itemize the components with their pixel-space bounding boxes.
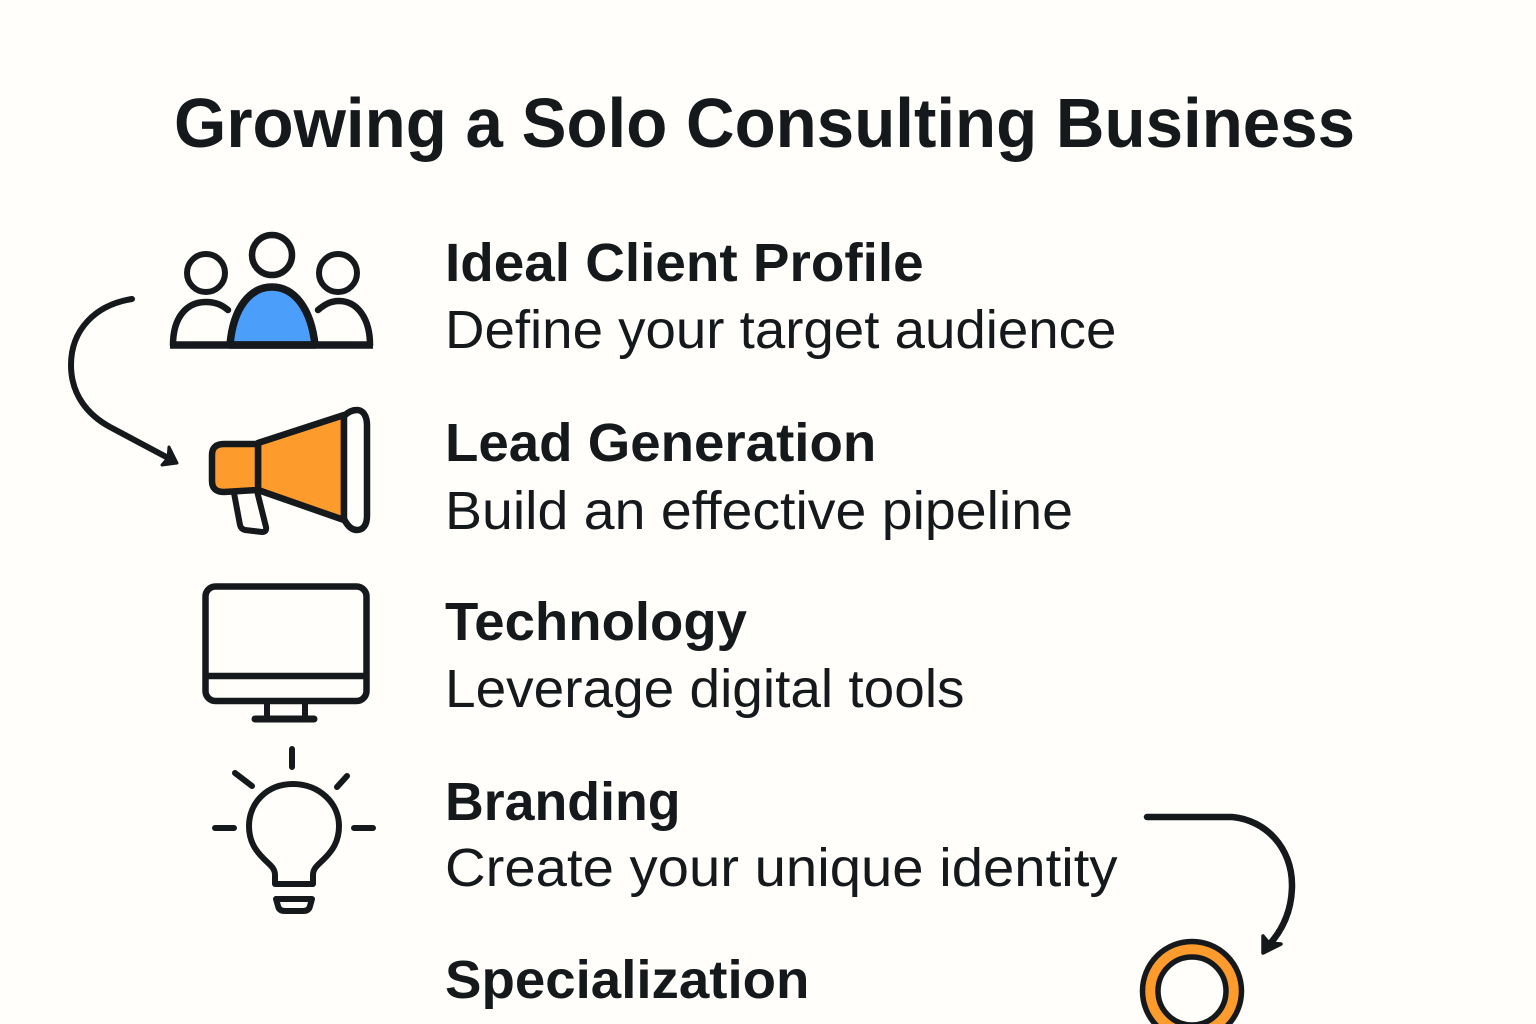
heading: Technology: Technology — [445, 592, 747, 652]
icon: orange ring — [1142, 942, 1242, 1024]
title: Growing a Solo Consulting Business — [174, 84, 1355, 162]
icon: megaphone — [212, 410, 367, 532]
heading: Lead Generation: Lead Generation — [445, 413, 876, 473]
heading: Specialization: Specialization — [445, 950, 809, 1010]
icon: light bulb — [215, 749, 373, 911]
heading: Ideal Client Profile: Ideal Client Profile — [445, 233, 924, 293]
text: Create your unique identity: Create your unique identity — [445, 838, 1117, 898]
heading: Branding: Branding — [445, 772, 681, 832]
arrow: curved to target — [1147, 817, 1292, 953]
arrow: curved to megaphone — [71, 299, 177, 465]
icon: people group — [170, 235, 373, 345]
text: Build an effective pipeline: Build an effective pipeline — [445, 481, 1073, 541]
icon: computer monitor — [206, 586, 366, 719]
text: Define your target audience: Define your target audience — [445, 300, 1116, 360]
text: Leverage digital tools: Leverage digital tools — [445, 659, 965, 719]
